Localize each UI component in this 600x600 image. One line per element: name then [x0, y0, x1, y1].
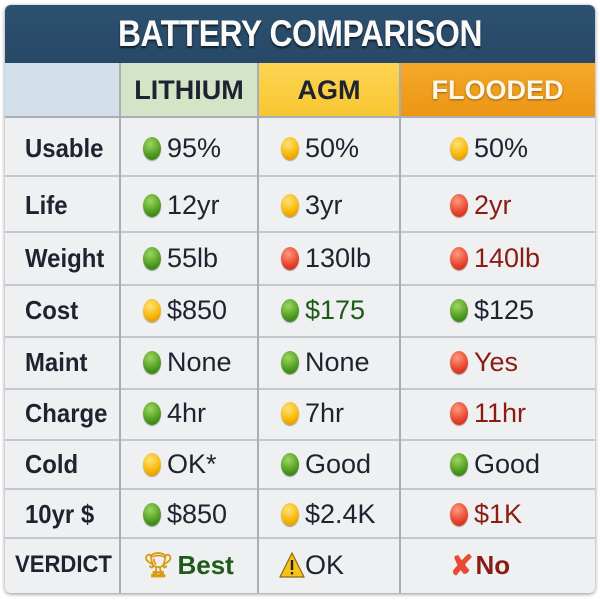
lithium column values: 4hr [167, 398, 206, 428]
row labels: Usable [25, 133, 103, 163]
row labels: Weight [25, 243, 104, 273]
AGM column values: Good [305, 448, 371, 478]
row labels [15, 133, 112, 578]
AGM column values: $2.4K [305, 498, 376, 528]
flooded column values: $1K [474, 498, 522, 528]
column header: AGM: AGM [298, 74, 360, 104]
lithium column values: 55lb [167, 242, 218, 272]
AGM column values: 50% [305, 132, 359, 162]
verdict: trophy best: Best [177, 550, 234, 580]
lithium column values [142, 132, 234, 580]
column header: blank [5, 63, 120, 117]
AGM column values [279, 132, 376, 580]
row labels: VERDICT [15, 551, 112, 578]
column header: flooded [400, 63, 595, 117]
AGM column values: 130lb [305, 242, 371, 272]
flooded column values: $125 [474, 294, 534, 324]
flooded column values: 11hr [474, 398, 526, 428]
verdict: X no: No [475, 550, 510, 580]
column header: flooded: FLOODED [432, 74, 564, 104]
verdict: X no [450, 550, 510, 580]
title: BATTERY COMPARISON [118, 13, 482, 54]
lithium column values: 95% [167, 132, 221, 162]
row labels: Maint [25, 347, 87, 377]
flooded column values [450, 132, 540, 580]
flooded column values: Good [474, 448, 540, 478]
lithium column values: None [167, 346, 232, 376]
flooded column values: 50% [474, 132, 528, 162]
verdict: trophy best: 🏆︎ [143, 552, 173, 578]
AGM column values: 3yr [305, 190, 343, 220]
row labels: Life [25, 190, 68, 220]
AGM column values: 7hr [305, 398, 344, 428]
lithium column values: OK* [167, 448, 217, 478]
lithium column values: $850 [167, 498, 227, 528]
verdict: trophy best [143, 550, 234, 580]
column header: AGM [258, 63, 400, 117]
flooded column values: 2yr [474, 190, 512, 220]
lithium column values: 12yr [167, 190, 220, 220]
flooded column values: Yes [474, 346, 518, 376]
verdict: warning OK [279, 550, 344, 580]
row labels: Cold [25, 449, 78, 479]
row labels: 10yr $ [25, 499, 94, 529]
row labels: Cost [25, 295, 78, 325]
verdict: X no: ✘ [450, 550, 473, 580]
flooded column values: 140lb [474, 242, 540, 272]
row labels: Charge [25, 398, 107, 428]
AGM column values: $175 [305, 294, 365, 324]
column header: lithium: LITHIUM [134, 74, 244, 104]
AGM column values: None [305, 346, 370, 376]
verdict: warning OK: OK [305, 550, 344, 580]
column header: lithium [120, 63, 258, 117]
lithium column values: $850 [167, 294, 227, 324]
title bar [5, 5, 595, 63]
